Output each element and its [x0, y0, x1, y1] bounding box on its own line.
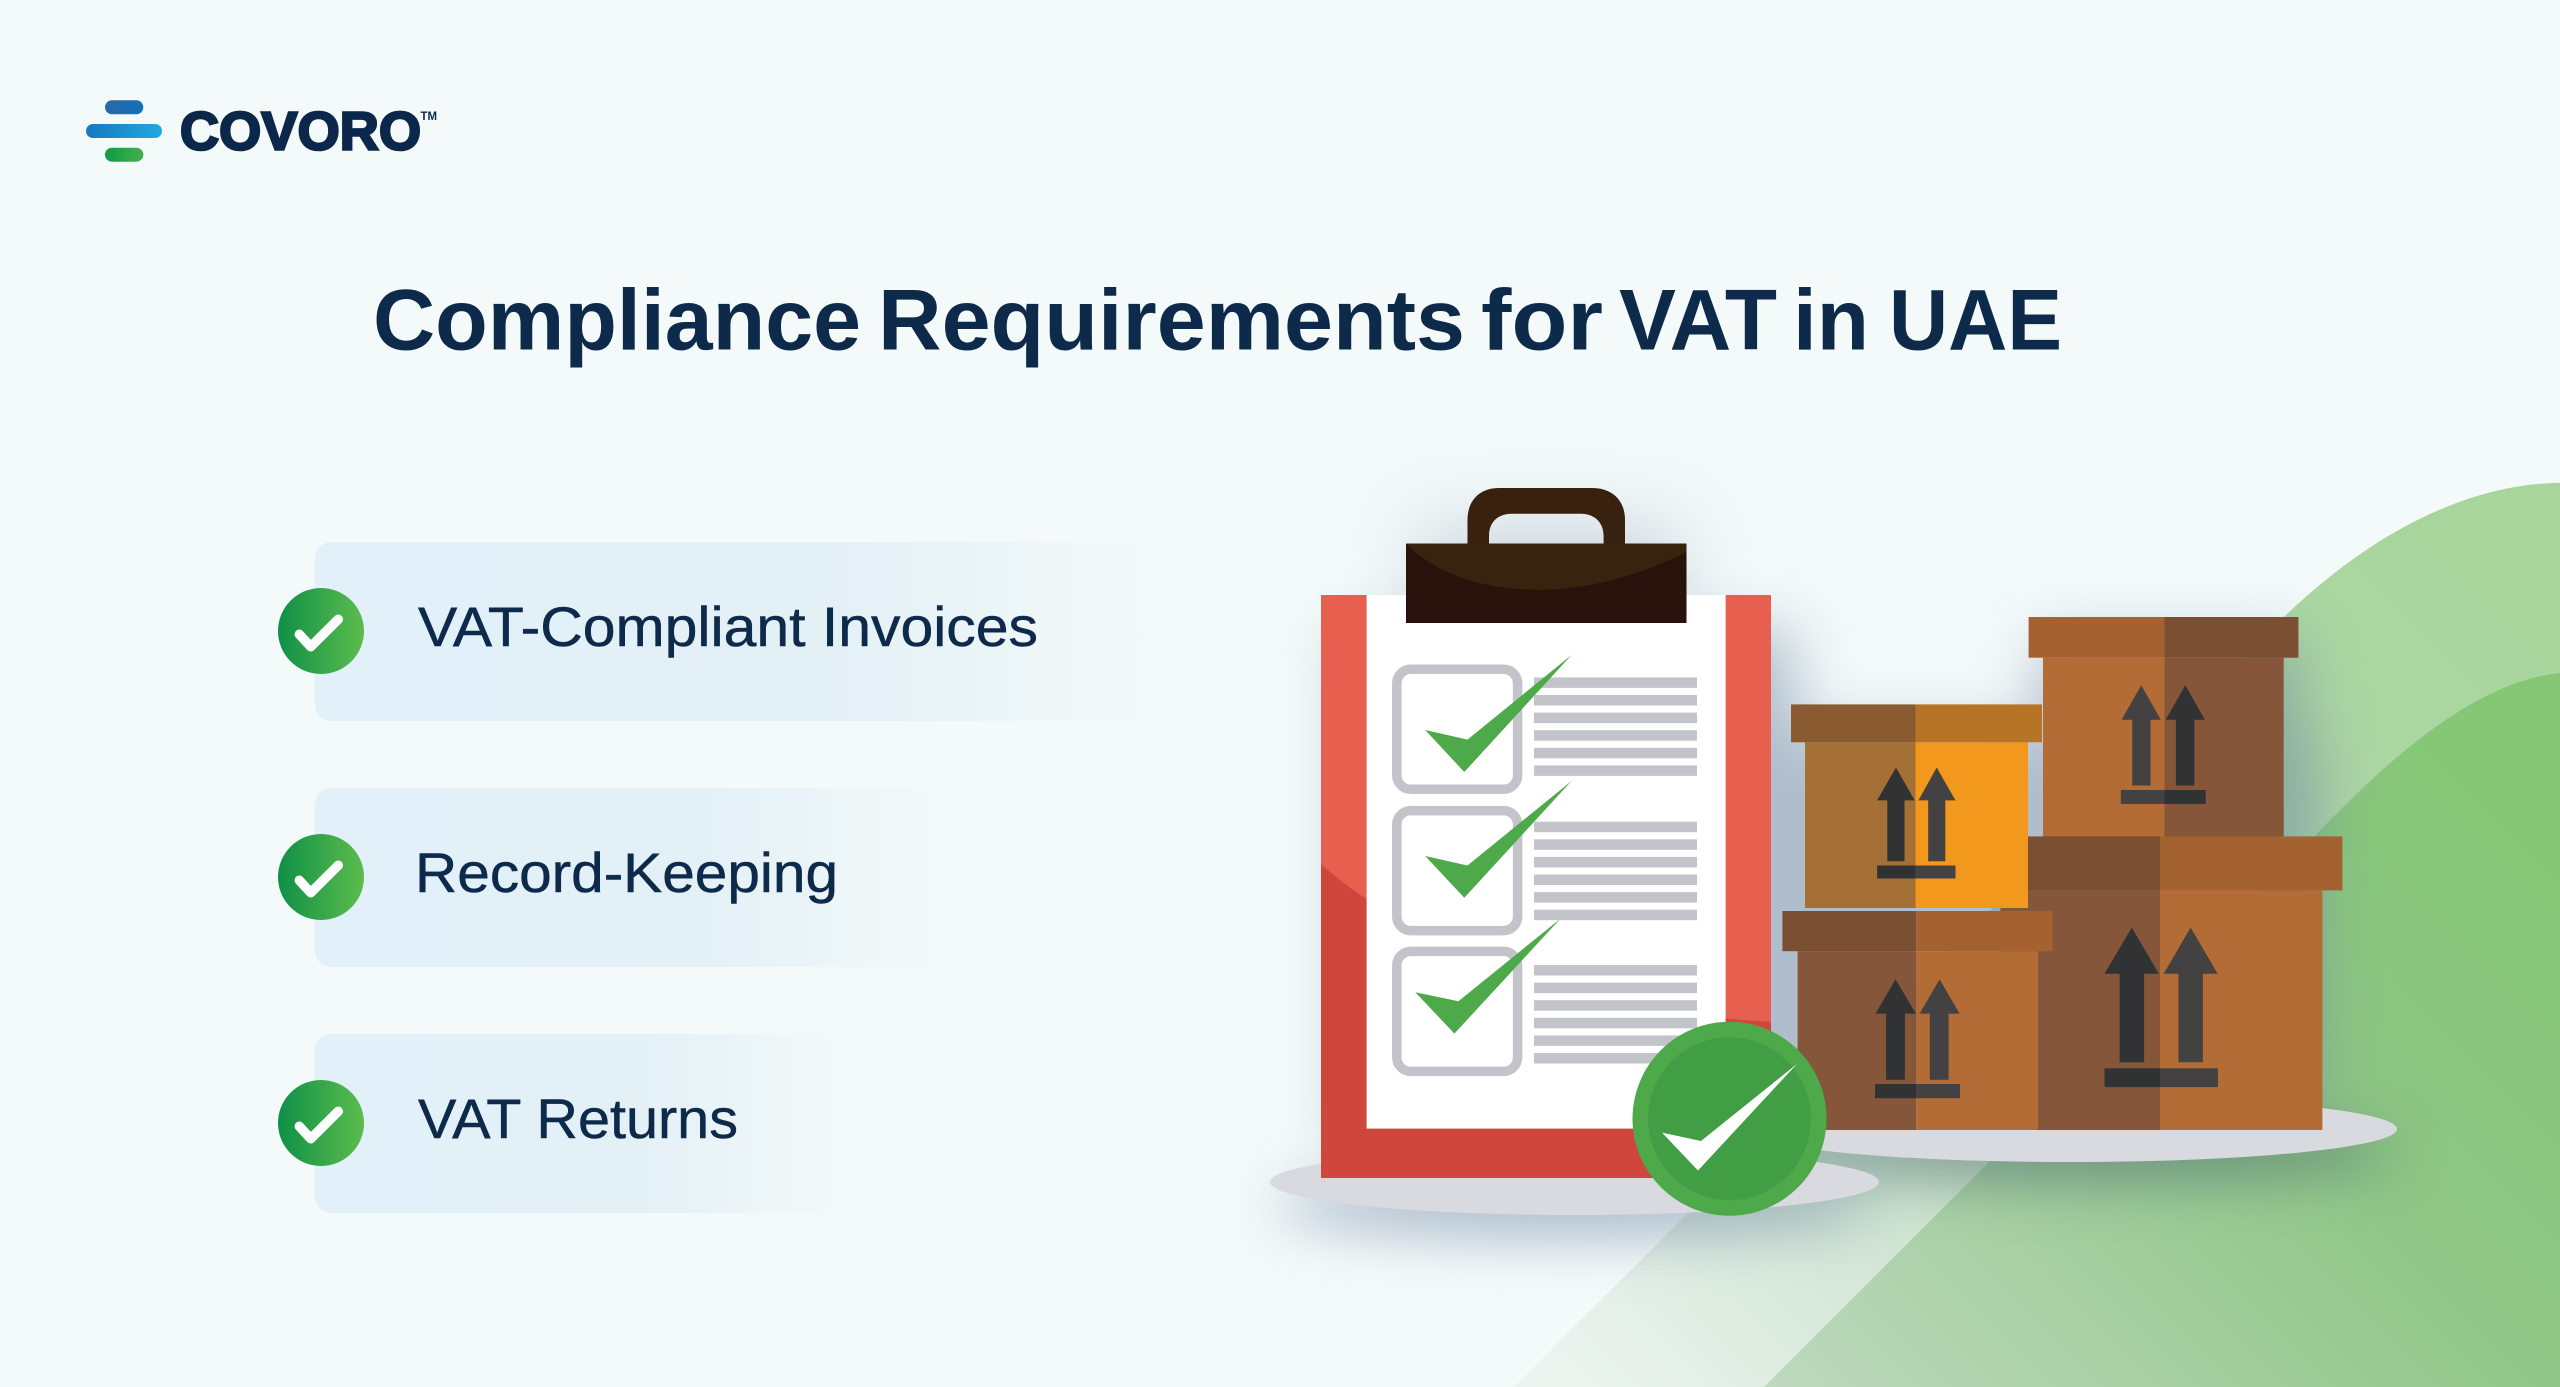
item: Record-Keeping — [278, 788, 947, 967]
ground shadow: clipboard — [1274, 1173, 1874, 1237]
item: VAT Returns — [278, 1034, 850, 1213]
icon: check — [278, 834, 364, 920]
arrows — [2121, 685, 2206, 804]
arrows — [1877, 768, 1956, 878]
ground ellipse: boxes — [1743, 1096, 2397, 1162]
clip handle — [1468, 488, 1625, 546]
checklist row 3 — [1397, 919, 1697, 1071]
title: VAT — [1619, 272, 1777, 368]
box: top right — [2029, 617, 2298, 837]
box: orange — [1791, 704, 2042, 908]
label: VAT-Compliant Invoices — [418, 595, 1038, 658]
arrows — [1875, 979, 1960, 1098]
title: Compliance — [373, 272, 861, 368]
checklist row 1 — [1397, 655, 1697, 789]
ground ellipse: clipboard — [1270, 1149, 1879, 1215]
title: in — [1793, 272, 1869, 368]
box: lower right — [2000, 836, 2342, 1130]
panel — [315, 788, 947, 967]
approval badge — [1632, 1022, 1826, 1216]
label: VAT Returns — [418, 1087, 738, 1150]
decorative green shape: light — [1514, 483, 2560, 1387]
logo wordmark: COVORO — [180, 102, 421, 162]
decorative green shape: dark — [1764, 673, 2560, 1387]
icon: check — [278, 1080, 364, 1166]
arrows — [2104, 928, 2218, 1087]
item: VAT-Compliant Invoices — [278, 542, 1160, 721]
ground shadow: boxes — [1745, 1118, 2395, 1182]
title — [373, 272, 2062, 368]
trademark: TM — [420, 111, 437, 123]
board — [1321, 595, 1771, 1178]
label: Record-Keeping — [415, 841, 838, 904]
panel — [315, 1034, 850, 1213]
clip base — [1406, 544, 1686, 623]
clipboard — [1321, 488, 1771, 1178]
title: UAE — [1889, 272, 2062, 368]
logo mark — [86, 100, 162, 162]
soft shadow: clip — [1420, 525, 1680, 635]
paper — [1367, 595, 1726, 1129]
box: lower left — [1782, 911, 2053, 1130]
title: for — [1481, 272, 1603, 368]
title: Requirements — [878, 272, 1465, 368]
icon: check — [278, 588, 364, 674]
logo — [86, 100, 437, 162]
checklist row 2 — [1397, 781, 1697, 931]
panel — [315, 542, 1160, 721]
box stack — [1782, 617, 2342, 1130]
soft shadows behind illustration — [1345, 630, 2320, 1155]
